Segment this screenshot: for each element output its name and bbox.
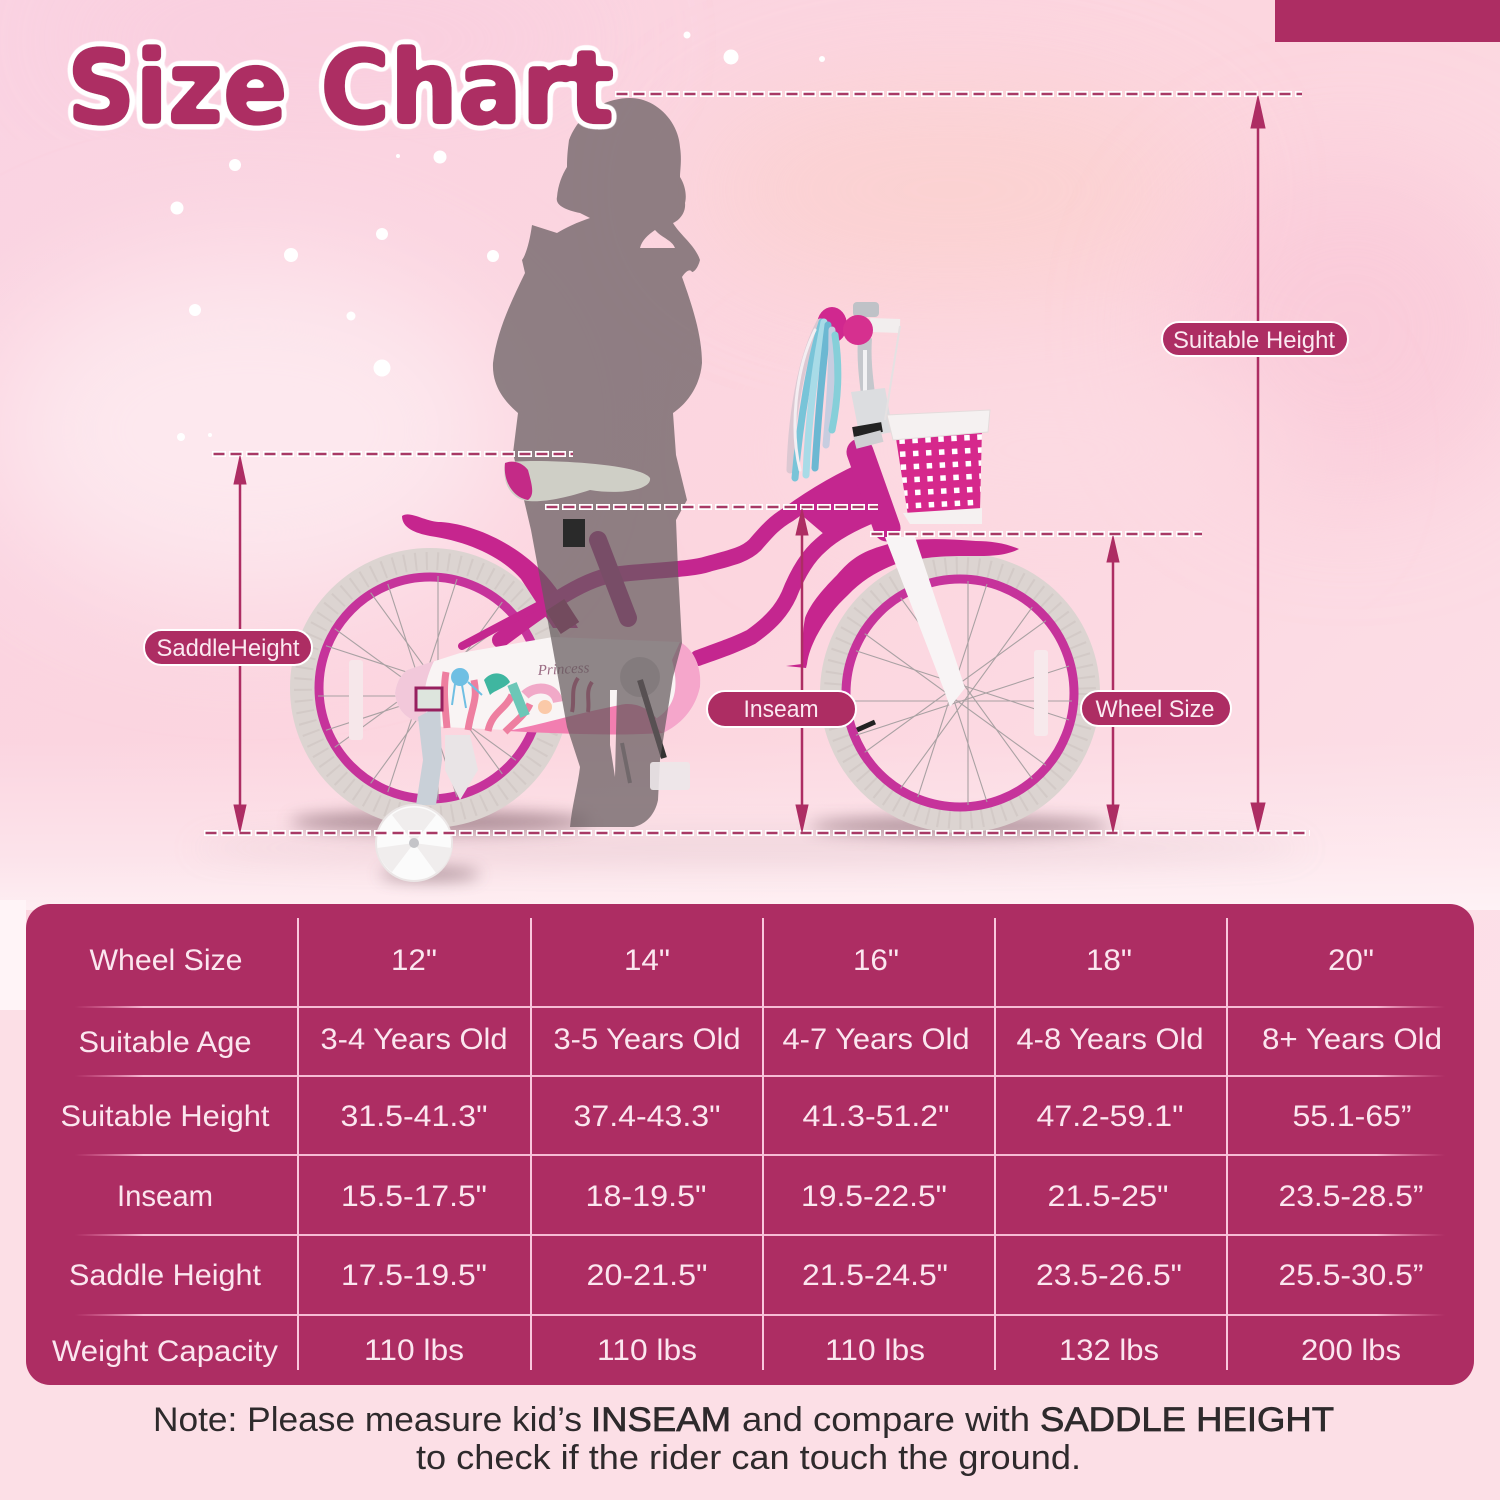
row: weight capacity: 132 lbs (1059, 1334, 1159, 1367)
note text: and compare with (742, 1401, 1030, 1439)
row: suitable age: 3-5 Years Old (554, 1023, 740, 1056)
row: saddle height: Saddle Height (69, 1259, 262, 1292)
corner tab (1275, 0, 1500, 42)
row: suitable age: Suitable Age (78, 1026, 252, 1059)
row: weight capacity: Weight Capacity (52, 1335, 278, 1368)
row: saddle height: 23.5-26.5" (1036, 1259, 1182, 1292)
row: wheel size: Wheel Size (90, 944, 242, 977)
note text: INSEAM (591, 1401, 731, 1439)
tassels (790, 322, 838, 478)
training wheel (376, 688, 452, 881)
size table panel (26, 904, 1474, 1385)
handlebar and stem (817, 302, 900, 443)
child silhouette (493, 98, 702, 827)
row: weight capacity: 110 lbs (597, 1334, 697, 1367)
pedal (650, 762, 690, 790)
label: suitable height: Suitable Height (1173, 327, 1335, 354)
row: wheel size: 12" (391, 944, 437, 977)
row: suitable height: 31.5-41.3" (340, 1100, 488, 1133)
row: suitable height: 37.4-43.3" (574, 1100, 720, 1133)
chain guard lettering: Princess (536, 660, 590, 679)
bicycle (303, 302, 1087, 881)
row: wheel size: 16" (853, 944, 899, 977)
label: saddle height (144, 630, 312, 665)
row: wheel size: 18" (1086, 944, 1132, 977)
row: suitable age (78, 1023, 1442, 1059)
arrow: suitable height (1251, 96, 1265, 832)
row: inseam: 15.5-17.5" (341, 1180, 487, 1213)
saddle (504, 461, 650, 547)
row: suitable height: 47.2-59.1" (1036, 1100, 1184, 1133)
row: wheel size: 20" (1328, 944, 1374, 977)
row: saddle height (69, 1259, 1424, 1292)
note text (153, 1401, 1334, 1477)
row: suitable height: Suitable Height (60, 1100, 270, 1133)
note text: to check if the rider can touch the ground. (416, 1439, 1081, 1477)
note text: Note: Please measure kid’s (153, 1401, 582, 1439)
sparkle dots (170, 32, 825, 441)
row: weight capacity (52, 1334, 1401, 1368)
row: suitable age: 8+ Years Old (1262, 1023, 1442, 1056)
label: inseam (707, 691, 856, 727)
row: saddle height: 17.5-19.5" (341, 1259, 487, 1292)
crank arm (620, 657, 664, 783)
fork (885, 537, 965, 707)
front fender (786, 539, 1019, 668)
arrow: saddle height (234, 456, 246, 832)
measurement lines (204, 94, 1310, 833)
row: suitable height: 55.1-65” (1292, 1100, 1412, 1133)
row: inseam: 23.5-28.5” (1278, 1180, 1424, 1213)
ground shadow (190, 811, 1310, 880)
row: suitable height: 41.3-51.2" (802, 1100, 950, 1133)
row: suitable age: 3-4 Years Old (320, 1023, 508, 1056)
row: saddle height: 20-21.5" (586, 1259, 708, 1292)
row: inseam: Inseam (117, 1180, 213, 1213)
row: suitable height (60, 1100, 1412, 1133)
rear wheel (303, 561, 557, 815)
row: wheel size (90, 944, 1374, 977)
row: suitable age: 4-7 Years Old (782, 1023, 970, 1056)
row: weight capacity: 200 lbs (1301, 1334, 1401, 1367)
row: saddle height: 25.5-30.5” (1278, 1259, 1424, 1292)
row: inseam: 19.5-22.5" (801, 1180, 947, 1213)
label: saddle height: SaddleHeight (156, 635, 300, 662)
row: wheel size: 14" (624, 944, 670, 977)
row: weight capacity: 110 lbs (825, 1334, 925, 1367)
note text: SADDLE HEIGHT (1040, 1401, 1334, 1439)
row: saddle height: 21.5-24.5" (802, 1259, 948, 1292)
label: suitable height (1162, 322, 1348, 356)
chain guard (395, 637, 700, 734)
row: inseam: 21.5-25" (1048, 1180, 1168, 1213)
row: suitable age: 4-8 Years Old (1016, 1023, 1204, 1056)
front wheel (833, 566, 1087, 820)
label: inseam: Inseam (744, 696, 818, 723)
basket (887, 410, 990, 524)
arrow: wheel size (1107, 536, 1119, 832)
frame (462, 452, 887, 658)
rear fender (402, 514, 578, 628)
row: inseam (117, 1180, 1424, 1213)
label: wheel size (1081, 691, 1231, 726)
row: inseam: 18-19.5" (586, 1180, 706, 1213)
arrow: inseam (796, 509, 808, 832)
label: wheel size: Wheel Size (1096, 696, 1214, 723)
row: weight capacity: 110 lbs (364, 1334, 464, 1367)
title: Size Chart (67, 29, 614, 148)
